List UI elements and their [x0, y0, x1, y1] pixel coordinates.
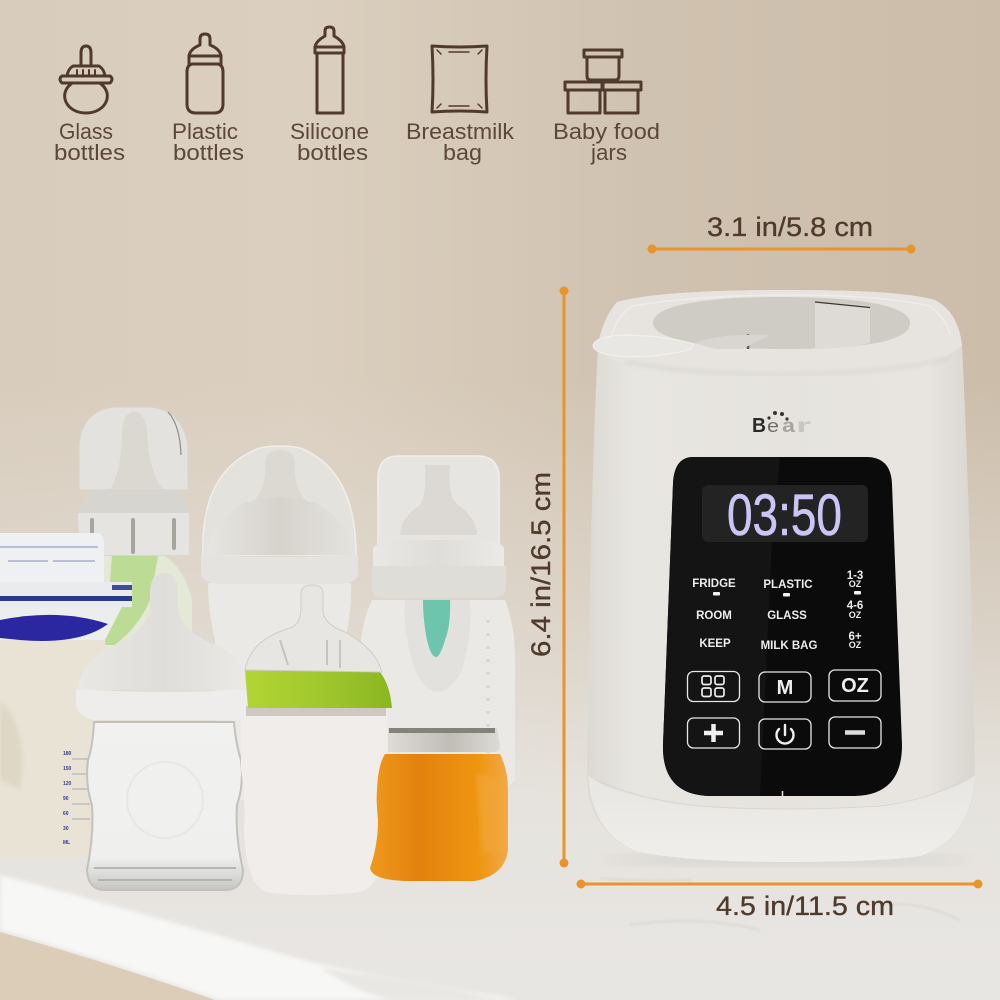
panel gloss reflection [663, 457, 780, 796]
wall below table [0, 932, 215, 1000]
setting labels: 4-6 [847, 600, 863, 612]
Bear logo: e [767, 416, 779, 436]
icon labels: jars [590, 140, 627, 165]
icon labels: bottles [173, 140, 244, 165]
display window [702, 485, 868, 542]
dimension label: 4.5 in: 4.5 in/11.5 cm [716, 891, 894, 921]
warmer lid tab [593, 335, 693, 357]
breastmilk bag: 180 [63, 751, 72, 757]
label: silicone bottles: Silicone [290, 119, 369, 144]
bottle: back left with green milk [78, 407, 192, 650]
minus button [829, 717, 881, 748]
bottle: right back anti-colic [360, 456, 515, 795]
setting labels: GLASS [767, 610, 807, 622]
setting labels: 1-3 [847, 570, 863, 582]
warmer rim [598, 290, 962, 374]
bottle: silicone with green band [241, 585, 392, 895]
display digits: 03:50 [727, 483, 842, 548]
panel notch [782, 791, 784, 796]
power button [759, 719, 811, 749]
setting labels: OZ [849, 610, 862, 620]
icon: breastmilk bag [432, 46, 487, 112]
dimension label: 6.4 in: 6.4 in/16.5 cm [526, 472, 556, 657]
setting labels: FRIDGE [692, 578, 736, 590]
dimension label: 3.1 in: 3.1 in/5.8 cm [707, 212, 873, 242]
icon: baby food jars [565, 50, 641, 113]
control panel [663, 457, 902, 796]
warmer body [587, 290, 975, 862]
indicator lights [713, 591, 861, 596]
icon labels: bag [443, 140, 482, 165]
setting labels: OZ [849, 579, 862, 589]
marble table top [0, 380, 1000, 1000]
warmer opening [653, 297, 910, 349]
warmer shadow [600, 854, 970, 866]
setting labels: MILK BAG [761, 640, 817, 652]
breastmilk bag: 150 [63, 766, 72, 772]
label: plastic bottles: Plastic [172, 119, 238, 144]
dimension: height [526, 286, 568, 868]
icon: plastic bottle [187, 34, 223, 113]
setting labels [692, 570, 863, 652]
setting labels: 6+ [848, 631, 862, 643]
OZ button [829, 670, 881, 701]
icon: glass bottle [60, 46, 112, 113]
dimension: base width [576, 880, 982, 921]
setting labels: OZ [849, 640, 862, 650]
baby food jar [370, 728, 508, 881]
icon labels: bottles [297, 140, 368, 165]
setting labels: KEEP [699, 638, 731, 650]
Bear logo: r [796, 416, 812, 437]
setting labels: PLASTIC [763, 579, 813, 591]
breastmilk bag: 120 [63, 781, 72, 787]
breastmilk bag [0, 533, 132, 858]
setting labels: ROOM [696, 610, 732, 622]
breastmilk bag: 60 [63, 811, 69, 817]
label: baby food jars: Baby food [553, 119, 660, 144]
bottle: center back wide neck [201, 446, 358, 800]
Bear logo: B [752, 415, 766, 437]
icon labels: bottles [54, 140, 125, 165]
Bear logo [752, 411, 812, 437]
bottle warmer [587, 290, 975, 866]
M button: M [777, 677, 793, 699]
OZ button: OZ [841, 675, 869, 697]
breastmilk bag: 30 [63, 826, 69, 832]
label: breastmilk bag: Breastmilk [406, 119, 515, 144]
M button [759, 672, 811, 702]
breastmilk bag: 90 [63, 796, 69, 802]
warmer base [588, 775, 975, 862]
icon: silicone bottle [315, 27, 344, 113]
icon row [60, 27, 641, 113]
icon labels [54, 119, 660, 165]
Bear logo: a [782, 416, 796, 437]
menu button [688, 672, 740, 702]
plus button [688, 718, 740, 748]
dimension: top width [648, 212, 916, 254]
breastmilk bag: ML [63, 840, 70, 846]
bottle: front glass bottle [76, 573, 252, 890]
label: glass bottles: Glass [59, 119, 113, 144]
